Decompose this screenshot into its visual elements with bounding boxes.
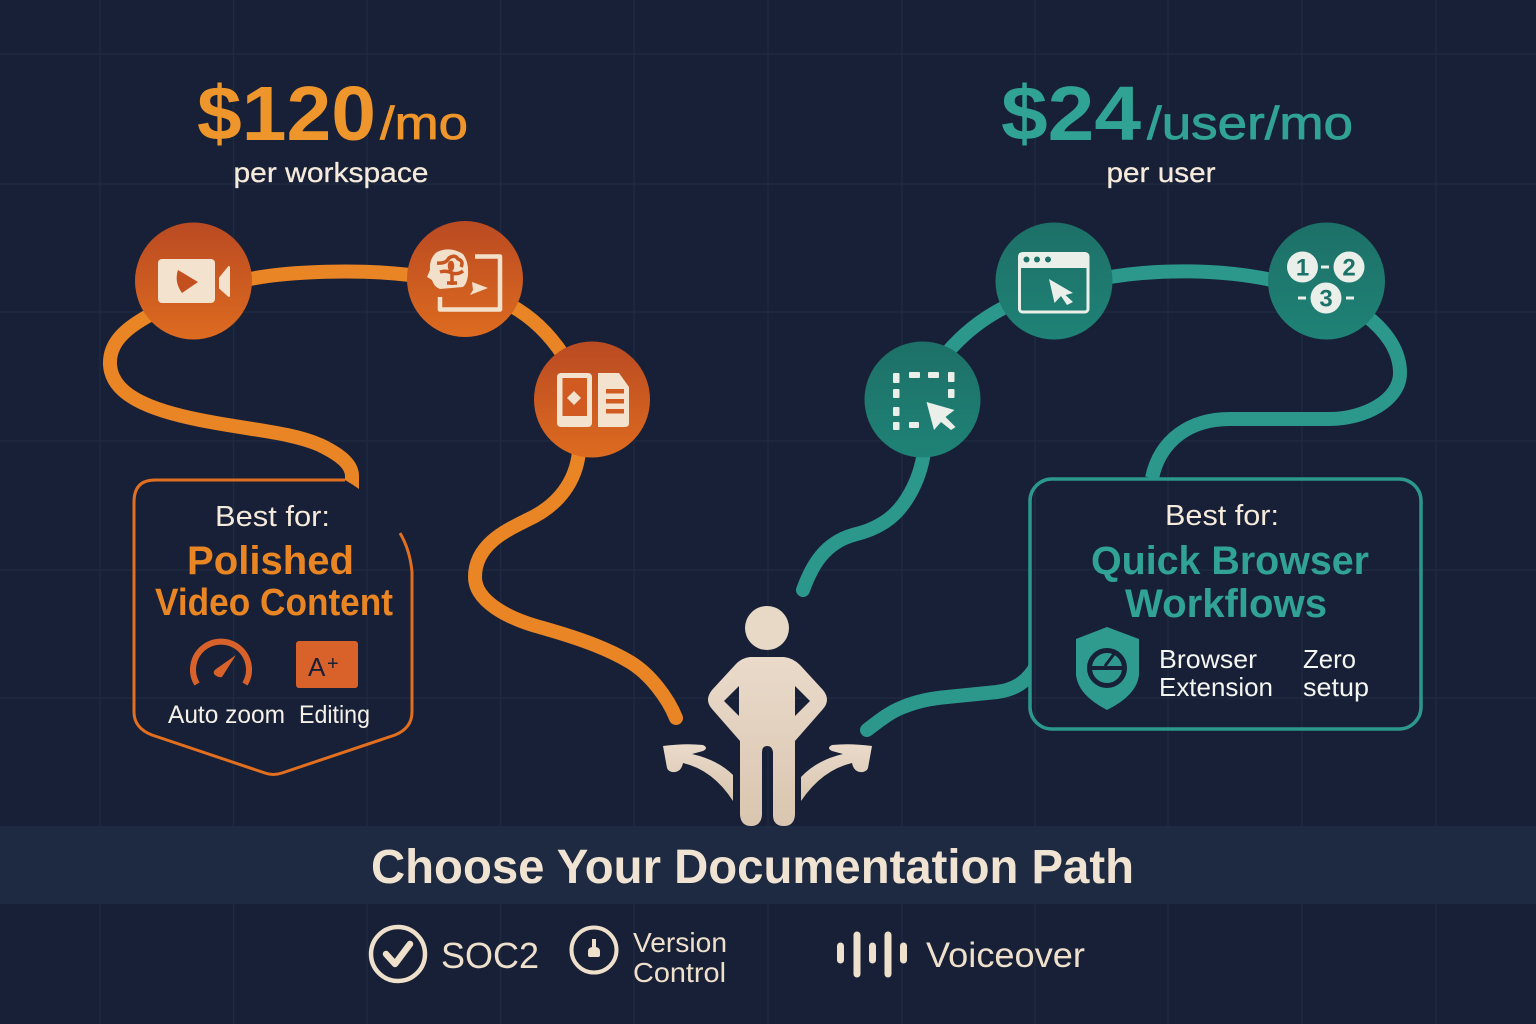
icon: numbered steps (1268, 222, 1385, 340)
feature labels: Extension (1159, 672, 1273, 702)
icon: browser window cursor (996, 222, 1112, 340)
feature labels (1159, 644, 1369, 702)
teal path (803, 271, 1400, 730)
heading: quick browser workflows: Quick Browser (1091, 539, 1369, 583)
arrow: right choice (801, 744, 872, 801)
right price: per user (1106, 157, 1216, 188)
left price: /mo (380, 97, 468, 149)
feature labels: Zero (1303, 644, 1356, 674)
feature labels: setup (1303, 672, 1369, 702)
icon: numbered steps: 2 (1342, 254, 1356, 282)
footer: SOC2: SOC2 (441, 935, 539, 976)
panel: quick browser workflows (1030, 479, 1421, 729)
icon: shield with browser logo (1076, 627, 1139, 710)
footer: voiceover (840, 935, 1085, 975)
footer: voiceover: Voiceover (926, 936, 1085, 975)
left price: $120 (197, 71, 376, 157)
footer: version control: Version (633, 927, 727, 958)
icon: gauge (193, 642, 249, 684)
footer: version control (572, 927, 727, 988)
heading: quick browser workflows (1091, 539, 1369, 626)
left price (197, 71, 468, 188)
person at crossroads (663, 606, 872, 826)
right price (1001, 71, 1353, 188)
heading: polished video content: Video Content (155, 582, 393, 624)
icon: A+ badge: + (327, 653, 339, 675)
footer: version control: Control (633, 957, 726, 988)
panel: polished video content (134, 480, 412, 774)
best for label: Best for: (1165, 500, 1279, 532)
right price: $24 (1001, 71, 1141, 157)
icon: numbered steps: 1 (1296, 254, 1309, 282)
icon: region select cursor (864, 342, 980, 458)
left price: per workspace (234, 157, 428, 188)
icon: document and video pages (534, 342, 650, 458)
feature labels (168, 701, 370, 729)
heading: quick browser workflows: Workflows (1125, 582, 1327, 626)
bottom title band (0, 826, 1536, 904)
icon: A+ badge (296, 641, 358, 688)
arrow: left choice (663, 744, 733, 801)
title: Choose Your Documentation Path (371, 841, 1134, 894)
feature labels: Auto zoom (168, 701, 285, 729)
right price: /user/mo (1147, 97, 1353, 149)
heading: polished video content (155, 539, 393, 624)
icon: video camera (135, 222, 252, 340)
orange path (110, 272, 676, 718)
icon: A+ badge: A (308, 652, 326, 682)
feature labels: Editing (299, 701, 370, 729)
feature labels: Browser (1159, 644, 1257, 674)
icon: numbered steps: 3 (1319, 286, 1333, 312)
heading: polished video content: Polished (187, 539, 354, 583)
footer: SOC2 (371, 927, 539, 981)
best for label: Best for: (215, 501, 330, 533)
icon: AI head with video frame (407, 221, 523, 337)
